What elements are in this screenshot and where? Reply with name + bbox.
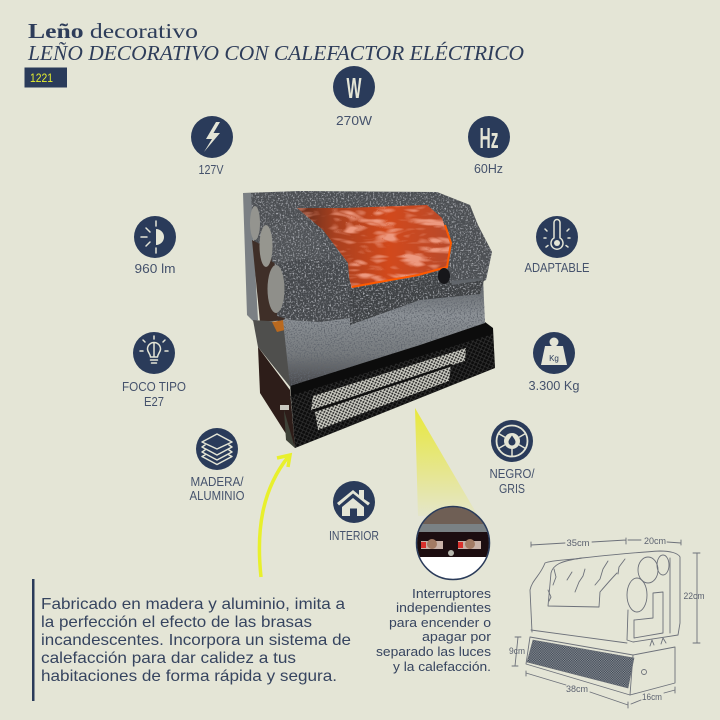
spec: weight: Kg bbox=[549, 354, 559, 363]
spec: weight: 3.300 Kg bbox=[528, 379, 580, 393]
switch caption: y la calefacción. bbox=[393, 660, 491, 674]
spec: colour: GRIS bbox=[499, 482, 525, 496]
title: LEÑO DECORATIVO CON CALEFACTOR ELÉCTRICO bbox=[27, 41, 524, 65]
switch caption: separado las luces bbox=[376, 645, 491, 659]
spec: material: ALUMINIO bbox=[190, 489, 245, 503]
title: Leño decorativo bbox=[28, 19, 198, 43]
dimension drawing: 20cm bbox=[644, 536, 666, 547]
spec: temperature bbox=[524, 216, 590, 275]
left log middle bbox=[264, 222, 322, 268]
description block: incandescentes. Incorpora un sistema de bbox=[41, 632, 351, 649]
spec: bulb bbox=[122, 332, 186, 409]
spec: lumens bbox=[134, 216, 176, 276]
heater base sketch bbox=[526, 637, 675, 695]
dimension drawing: 9cm bbox=[509, 646, 525, 657]
right dark knot bbox=[438, 268, 450, 284]
dimension drawing: 16cm bbox=[642, 692, 662, 703]
arrow to heater bbox=[259, 455, 290, 577]
switch caption: independientes bbox=[396, 601, 491, 615]
spec: lumens: 960 lm bbox=[134, 262, 176, 276]
description block: habitaciones de forma rápida y segura. bbox=[41, 668, 337, 685]
title bbox=[27, 19, 524, 65]
rock under flame bbox=[350, 269, 484, 325]
heater base bbox=[258, 322, 495, 448]
left log top bbox=[254, 205, 298, 242]
dimension drawing bbox=[509, 536, 705, 708]
measure lines bbox=[531, 538, 681, 547]
spec: frequency: Hz bbox=[480, 123, 498, 155]
spec: wattage: W bbox=[346, 73, 362, 105]
product code tag bbox=[24, 68, 67, 88]
spec: indoor use bbox=[329, 481, 379, 543]
description block: Fabricado en madera y aluminio, imita a bbox=[41, 596, 345, 613]
spec: colour bbox=[490, 420, 535, 496]
spec: frequency bbox=[468, 116, 510, 176]
description block bbox=[32, 579, 351, 701]
spec: frequency: 60Hz bbox=[474, 162, 503, 176]
spec: wattage: 270W bbox=[336, 114, 372, 128]
back panel and shelf bbox=[243, 193, 258, 322]
switch caption bbox=[376, 587, 491, 674]
product photo: log heater bbox=[243, 191, 495, 448]
description block: la perfección el efecto de las brasas bbox=[41, 614, 312, 631]
spec: bulb: E27 bbox=[144, 395, 164, 409]
spec: indoor use: INTERIOR bbox=[329, 529, 379, 543]
dimension drawing: 22cm bbox=[684, 591, 705, 602]
spec: wattage bbox=[333, 66, 375, 128]
switch caption: Interruptores bbox=[412, 587, 491, 601]
log ends bbox=[250, 206, 260, 240]
spec: colour: NEGRO/ bbox=[490, 467, 535, 481]
spec: material: MADERA/ bbox=[190, 475, 244, 489]
glowing flame panel bbox=[297, 205, 450, 288]
spec: material bbox=[190, 428, 245, 503]
left log lower bbox=[275, 258, 351, 322]
switch detail circle bbox=[415, 505, 491, 581]
spec: voltage bbox=[191, 116, 233, 177]
dimension drawing: 38cm bbox=[566, 684, 588, 695]
description block: calefacción para dar calidez a tus bbox=[41, 650, 296, 667]
spec: voltage: 127V bbox=[198, 163, 224, 177]
log mass backing bbox=[243, 191, 492, 325]
spec: temperature: ADAPTABLE bbox=[524, 261, 590, 275]
beam to switch detail bbox=[415, 408, 478, 516]
switch caption: apagar por bbox=[422, 630, 491, 644]
switch caption: para encender o bbox=[389, 616, 491, 630]
outline sketch bbox=[530, 551, 680, 642]
spec: weight bbox=[528, 332, 580, 393]
dimension drawing: 35cm bbox=[566, 538, 590, 549]
concrete front bbox=[283, 278, 485, 386]
product code tag: 1221 bbox=[30, 71, 53, 85]
spec: bulb: FOCO TIPO bbox=[122, 380, 186, 394]
